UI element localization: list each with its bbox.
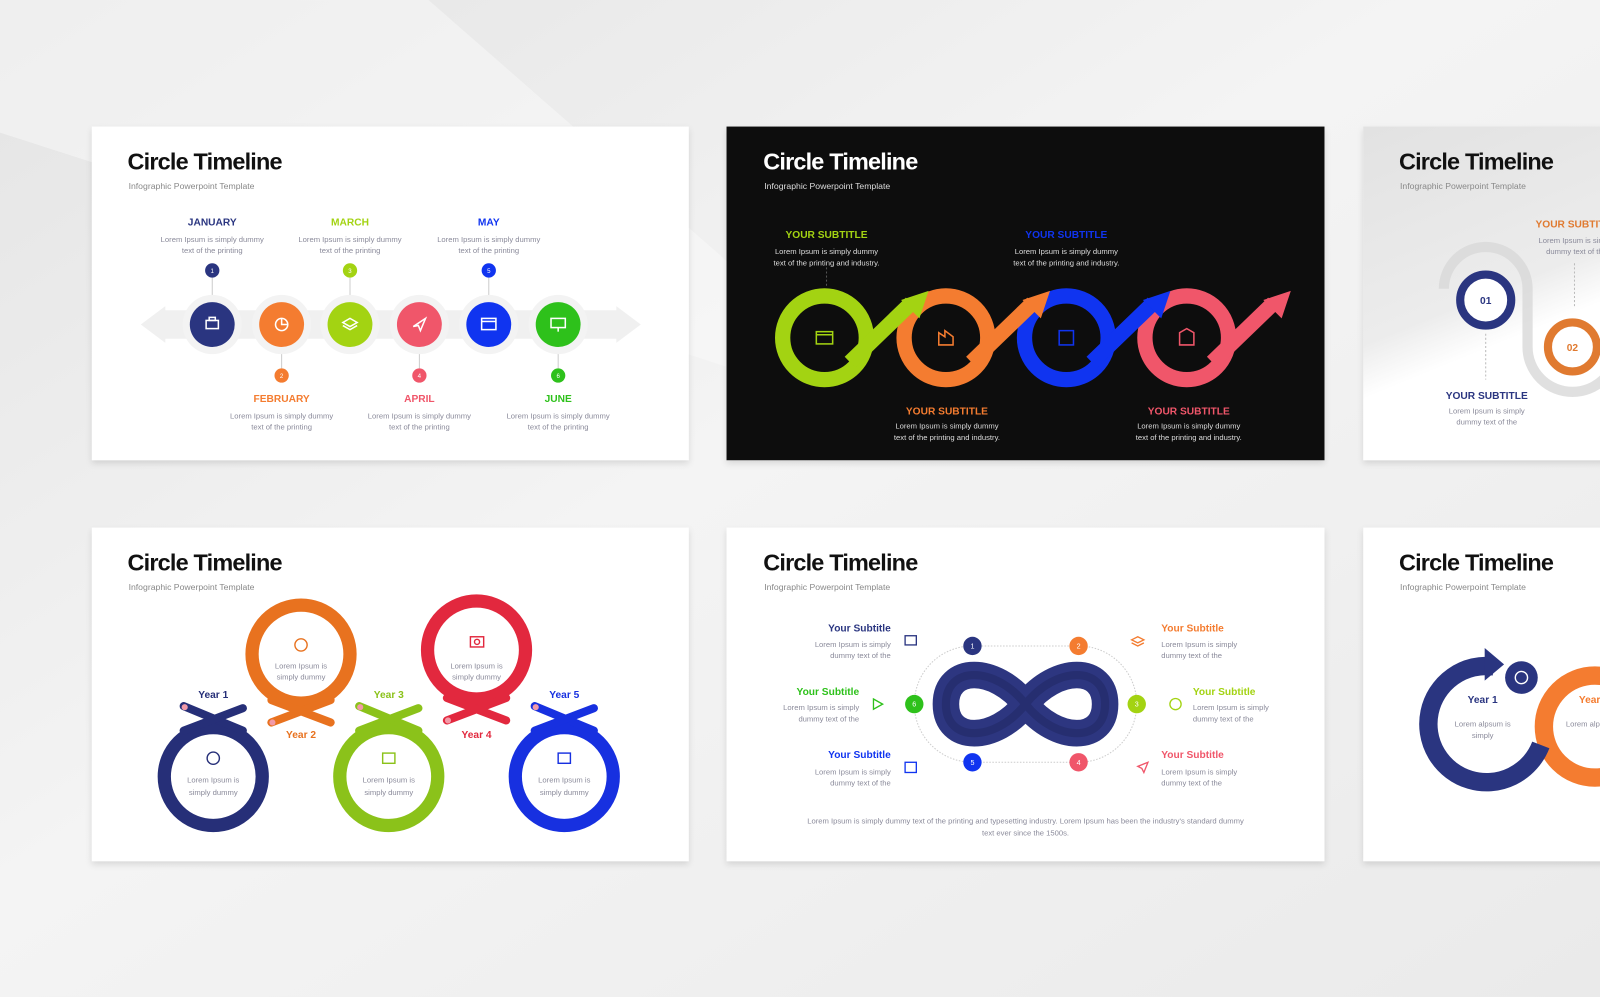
loop icons bbox=[207, 637, 570, 764]
subtitles: YOUR SUBTITLE bbox=[906, 406, 988, 417]
ring texts: simply bbox=[1472, 731, 1494, 740]
subtitle: Infographic Powerpoint Template bbox=[1400, 582, 1526, 592]
side texts bbox=[783, 624, 1269, 788]
month labels: Lorem Ipsum is simply dummy bbox=[507, 411, 610, 420]
step 01: 01 bbox=[1480, 296, 1492, 307]
subtitle: Infographic Powerpoint Template bbox=[764, 582, 890, 592]
number markers bbox=[205, 263, 565, 383]
month labels: JUNE bbox=[545, 394, 572, 405]
month labels: text of the printing bbox=[528, 423, 589, 432]
title: Circle Timeline bbox=[1399, 148, 1554, 174]
subtitles: text of the printing and industry. bbox=[894, 433, 1000, 442]
side texts: Lorem Ipsum is simply bbox=[1161, 768, 1237, 777]
loop icons bbox=[816, 329, 1194, 345]
number markers: 5 bbox=[487, 268, 491, 275]
side texts: dummy text of the bbox=[1161, 779, 1222, 788]
subtitle: Infographic Powerpoint Template bbox=[764, 181, 890, 191]
ring texts: Year 1 bbox=[1468, 695, 1498, 706]
slide 4: pencil loops bbox=[92, 528, 689, 861]
subtitle: Infographic Powerpoint Template bbox=[129, 582, 255, 592]
title: Circle Timeline bbox=[1399, 549, 1554, 575]
loops bbox=[164, 601, 613, 826]
title: Circle Timeline bbox=[128, 148, 282, 174]
number markers: 2 bbox=[280, 373, 284, 380]
number nodes: 1 bbox=[970, 642, 974, 650]
month labels: MARCH bbox=[331, 218, 369, 229]
month labels: Lorem Ipsum is simply dummy bbox=[230, 411, 333, 420]
loop texts: simply dummy bbox=[452, 673, 501, 682]
footer text: Lorem Ipsum is simply dummy text of the printing and typesetting industry. Lorem Ipsum has been the industry's standard dummy bbox=[807, 817, 1244, 826]
slide 1: month timeline bbox=[92, 127, 689, 460]
subtitles: Lorem Ipsum is simply dummy bbox=[775, 247, 878, 256]
side texts: Lorem Ipsum is simply bbox=[815, 640, 891, 649]
navy arrow ring bbox=[1428, 648, 1541, 782]
side texts: dummy text of the bbox=[798, 714, 859, 723]
loop texts: Lorem Ipsum is bbox=[538, 776, 591, 785]
side texts: Lorem Ipsum is simply bbox=[815, 768, 891, 777]
loop texts: simply dummy bbox=[277, 673, 326, 682]
year labels: Year 3 bbox=[374, 690, 404, 701]
year labels: Year 2 bbox=[286, 730, 316, 741]
slide 2: dark arrow loops bbox=[727, 127, 1324, 460]
number nodes: 3 bbox=[1135, 701, 1139, 709]
subtitle: Infographic Powerpoint Template bbox=[1400, 181, 1526, 191]
loop texts: Lorem Ipsum is bbox=[187, 776, 240, 785]
month labels: Lorem Ipsum is simply dummy bbox=[368, 411, 471, 420]
number nodes: 4 bbox=[1077, 759, 1081, 767]
number markers: 4 bbox=[418, 373, 422, 380]
loop texts: Lorem Ipsum is bbox=[275, 661, 327, 670]
month labels: text of the printing bbox=[182, 246, 243, 255]
month labels: Lorem Ipsum is simply dummy bbox=[437, 235, 541, 244]
title: Circle Timeline bbox=[763, 549, 918, 575]
side texts: Lorem Ipsum is simply bbox=[1161, 640, 1237, 649]
footer text bbox=[807, 816, 1244, 838]
number nodes: 5 bbox=[970, 759, 974, 767]
month labels bbox=[161, 218, 610, 432]
loop texts: simply dummy bbox=[364, 788, 413, 797]
side texts: Lorem Ipsum is simply bbox=[783, 703, 859, 712]
subtitles: Lorem Ipsum is simply dummy bbox=[1015, 247, 1118, 256]
year labels: Year 4 bbox=[462, 730, 492, 741]
number markers: 3 bbox=[348, 268, 352, 275]
loop texts: simply dummy bbox=[540, 788, 589, 797]
side texts: dummy text of the bbox=[830, 651, 891, 660]
subtitle: Infographic Powerpoint Template bbox=[129, 181, 255, 191]
subtitles: YOUR SUBTITLE bbox=[1148, 406, 1230, 417]
side texts: dummy text of the bbox=[1161, 651, 1222, 660]
subtitles: text of the printing and industry. bbox=[774, 258, 880, 267]
side texts: Your Subtitle bbox=[828, 624, 891, 635]
loop texts: simply dummy bbox=[189, 788, 238, 797]
ring texts: Lorem alpsum is bbox=[1455, 720, 1511, 729]
loop texts: Lorem Ipsum is bbox=[450, 661, 503, 670]
footer text: text ever since the 1500s. bbox=[982, 829, 1069, 838]
month labels: text of the printing bbox=[251, 423, 312, 432]
month labels: JANUARY bbox=[188, 218, 237, 229]
year labels bbox=[198, 690, 580, 741]
subtitles: YOUR SUBTITLE bbox=[1025, 230, 1108, 241]
month labels: text of the printing bbox=[458, 246, 519, 255]
title: Circle Timeline bbox=[128, 549, 282, 575]
slide 6: partial ring timeline bbox=[1363, 528, 1600, 861]
month labels: text of the printing bbox=[389, 423, 450, 432]
loop texts: Lorem Ipsum is bbox=[363, 776, 415, 785]
year labels: Year 1 bbox=[198, 690, 229, 701]
subtitles: text of the printing and industry. bbox=[1136, 433, 1242, 442]
subtitles: text of the printing and industry. bbox=[1013, 258, 1119, 267]
number nodes: 6 bbox=[912, 701, 916, 709]
side texts: dummy text of the bbox=[1193, 714, 1254, 723]
infinity symbol bbox=[946, 675, 1105, 733]
icon badge bbox=[1505, 661, 1538, 694]
side texts: Your Subtitle bbox=[828, 750, 891, 761]
number nodes: 2 bbox=[1077, 642, 1081, 650]
arrow band bbox=[141, 306, 641, 343]
subtitles: Lorem Ipsum is simply dummy bbox=[895, 422, 999, 431]
subtitle texts: Lorem Ipsum is simply bbox=[1449, 406, 1525, 415]
grey track bbox=[1444, 247, 1600, 392]
step 02: 02 bbox=[1567, 343, 1578, 354]
dotted orbit bbox=[914, 646, 1137, 762]
subtitles bbox=[774, 230, 1242, 442]
subtitle texts bbox=[1446, 220, 1600, 427]
side texts: Lorem Ipsum is simply bbox=[1193, 703, 1269, 712]
month labels: Lorem Ipsum is simply dummy bbox=[161, 235, 264, 244]
side texts: Your Subtitle bbox=[797, 687, 860, 698]
side texts: Your Subtitle bbox=[1161, 624, 1224, 635]
side texts: Your Subtitle bbox=[1161, 750, 1224, 761]
subtitle texts: dummy text of the bbox=[1456, 418, 1517, 427]
orange ring bbox=[1544, 676, 1600, 778]
crossed pencils bbox=[184, 698, 594, 731]
subtitles: YOUR SUBTITLE bbox=[785, 230, 868, 241]
subtitle texts: YOUR SUBTITLE bbox=[1446, 391, 1528, 402]
slide 3: partial track timeline bbox=[1363, 127, 1600, 460]
number markers: 1 bbox=[211, 268, 215, 275]
month labels: text of the printing bbox=[320, 246, 380, 255]
number nodes bbox=[905, 637, 1146, 771]
side texts: Your Subtitle bbox=[1193, 687, 1256, 698]
slide 5: infinity bbox=[727, 528, 1324, 861]
side icons bbox=[873, 636, 1181, 772]
ring texts bbox=[1455, 695, 1600, 740]
month labels: APRIL bbox=[404, 394, 435, 405]
loop rings bbox=[783, 296, 1229, 380]
year labels: Year 5 bbox=[549, 690, 580, 701]
number markers: 6 bbox=[556, 373, 560, 380]
loop texts bbox=[187, 661, 591, 797]
side texts: dummy text of the bbox=[830, 779, 891, 788]
month labels: Lorem Ipsum is simply dummy bbox=[298, 235, 402, 244]
subtitles: Lorem Ipsum is simply dummy bbox=[1137, 422, 1241, 431]
title: Circle Timeline bbox=[763, 148, 918, 174]
step 02 bbox=[1548, 263, 1597, 371]
month labels: MAY bbox=[478, 218, 500, 229]
month labels: FEBRUARY bbox=[254, 394, 310, 405]
timeline circles bbox=[183, 295, 588, 354]
loop arrows bbox=[850, 291, 1291, 362]
step 01 bbox=[1460, 275, 1511, 380]
